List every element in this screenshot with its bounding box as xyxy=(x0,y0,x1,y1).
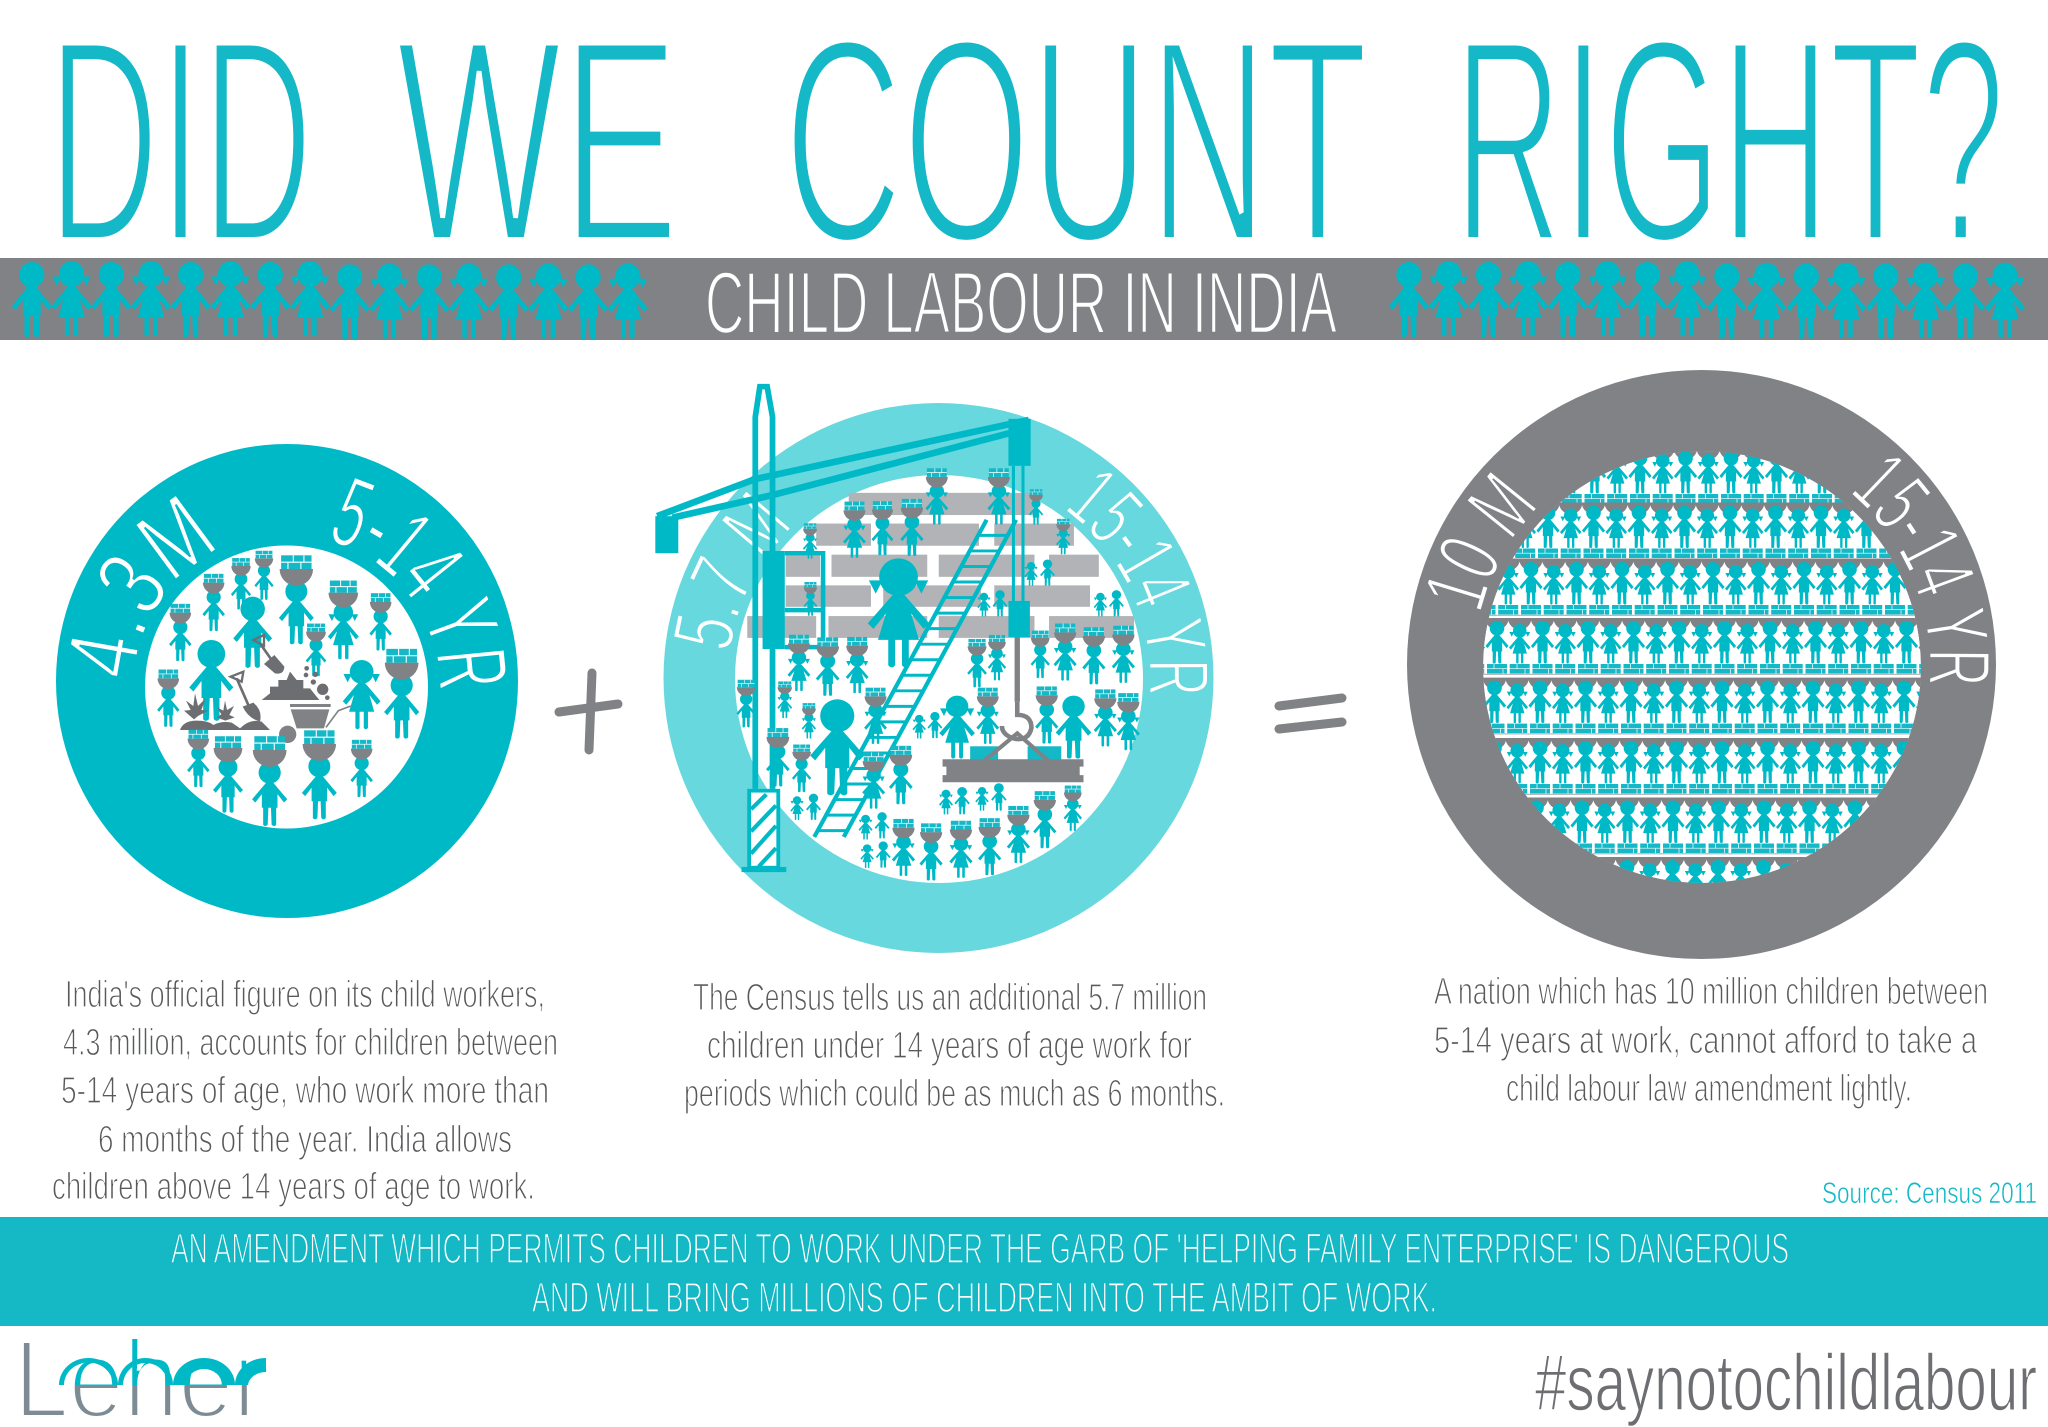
ladder xyxy=(814,520,1016,837)
ring label 5.7 M: 5.7 M xyxy=(674,492,790,648)
panel: circle 10M xyxy=(1407,370,1996,959)
text block: official figure xyxy=(52,974,558,1208)
text block: census: children under 14 years of age work for xyxy=(707,1025,1192,1067)
children xyxy=(736,468,1140,881)
panel: subtitle band xyxy=(0,253,2048,352)
ring label 15-14 YR: 15-14 YR xyxy=(1067,473,1207,692)
ring label 15-14 YR: 15-14 YR xyxy=(1852,458,1988,682)
title xyxy=(48,0,2005,303)
text block: census: periods which could be as much as 6 months. xyxy=(684,1073,1225,1115)
text block: official figure: 6 months of the year. India allows xyxy=(98,1119,512,1161)
operator: plus xyxy=(559,673,618,750)
panel: circle 5.7M xyxy=(655,384,1214,953)
wall of grey bricks xyxy=(747,493,1134,638)
illustration: construction site xyxy=(655,387,1140,881)
text block: census: The Census tells us an additional 5.7 million xyxy=(693,977,1207,1019)
rows of children carrying bricks xyxy=(1483,451,1921,883)
subtitle: CHILD LABOUR IN INDIA xyxy=(705,253,1337,352)
ring label 10 M: 10 M xyxy=(1428,472,1536,610)
text block: official figure: 4.3 million, accounts for children between xyxy=(63,1022,558,1064)
text block: official figure: India's official figure on its child workers, xyxy=(65,974,545,1016)
panel: bottom banner: AND WILL BRING MILLIONS OF CHILDREN INTO THE AMBIT OF WORK. xyxy=(532,1274,1437,1322)
text block: official figure: children above 14 years of age to work. xyxy=(52,1166,535,1208)
gardening and rubble tools xyxy=(180,635,351,743)
panel: bottom banner xyxy=(0,1217,2048,1326)
text block: official figure: 5-14 years of age, who work more than xyxy=(61,1070,549,1112)
paper-chain children right xyxy=(1389,261,2025,339)
ring label 5-14 YR: 5-14 YR xyxy=(333,478,506,688)
ring label 4.3M: 4.3M xyxy=(71,496,215,676)
operator: equals xyxy=(1279,698,1342,729)
paper-chain children left xyxy=(12,261,648,340)
crane xyxy=(655,387,1031,872)
text block: census xyxy=(684,977,1225,1115)
text block: nation xyxy=(1434,971,1988,1110)
hook and loaded pallet xyxy=(943,637,1084,782)
panel: circle 4.3M xyxy=(56,444,518,918)
illustration: children, tools and rubble xyxy=(157,551,419,826)
